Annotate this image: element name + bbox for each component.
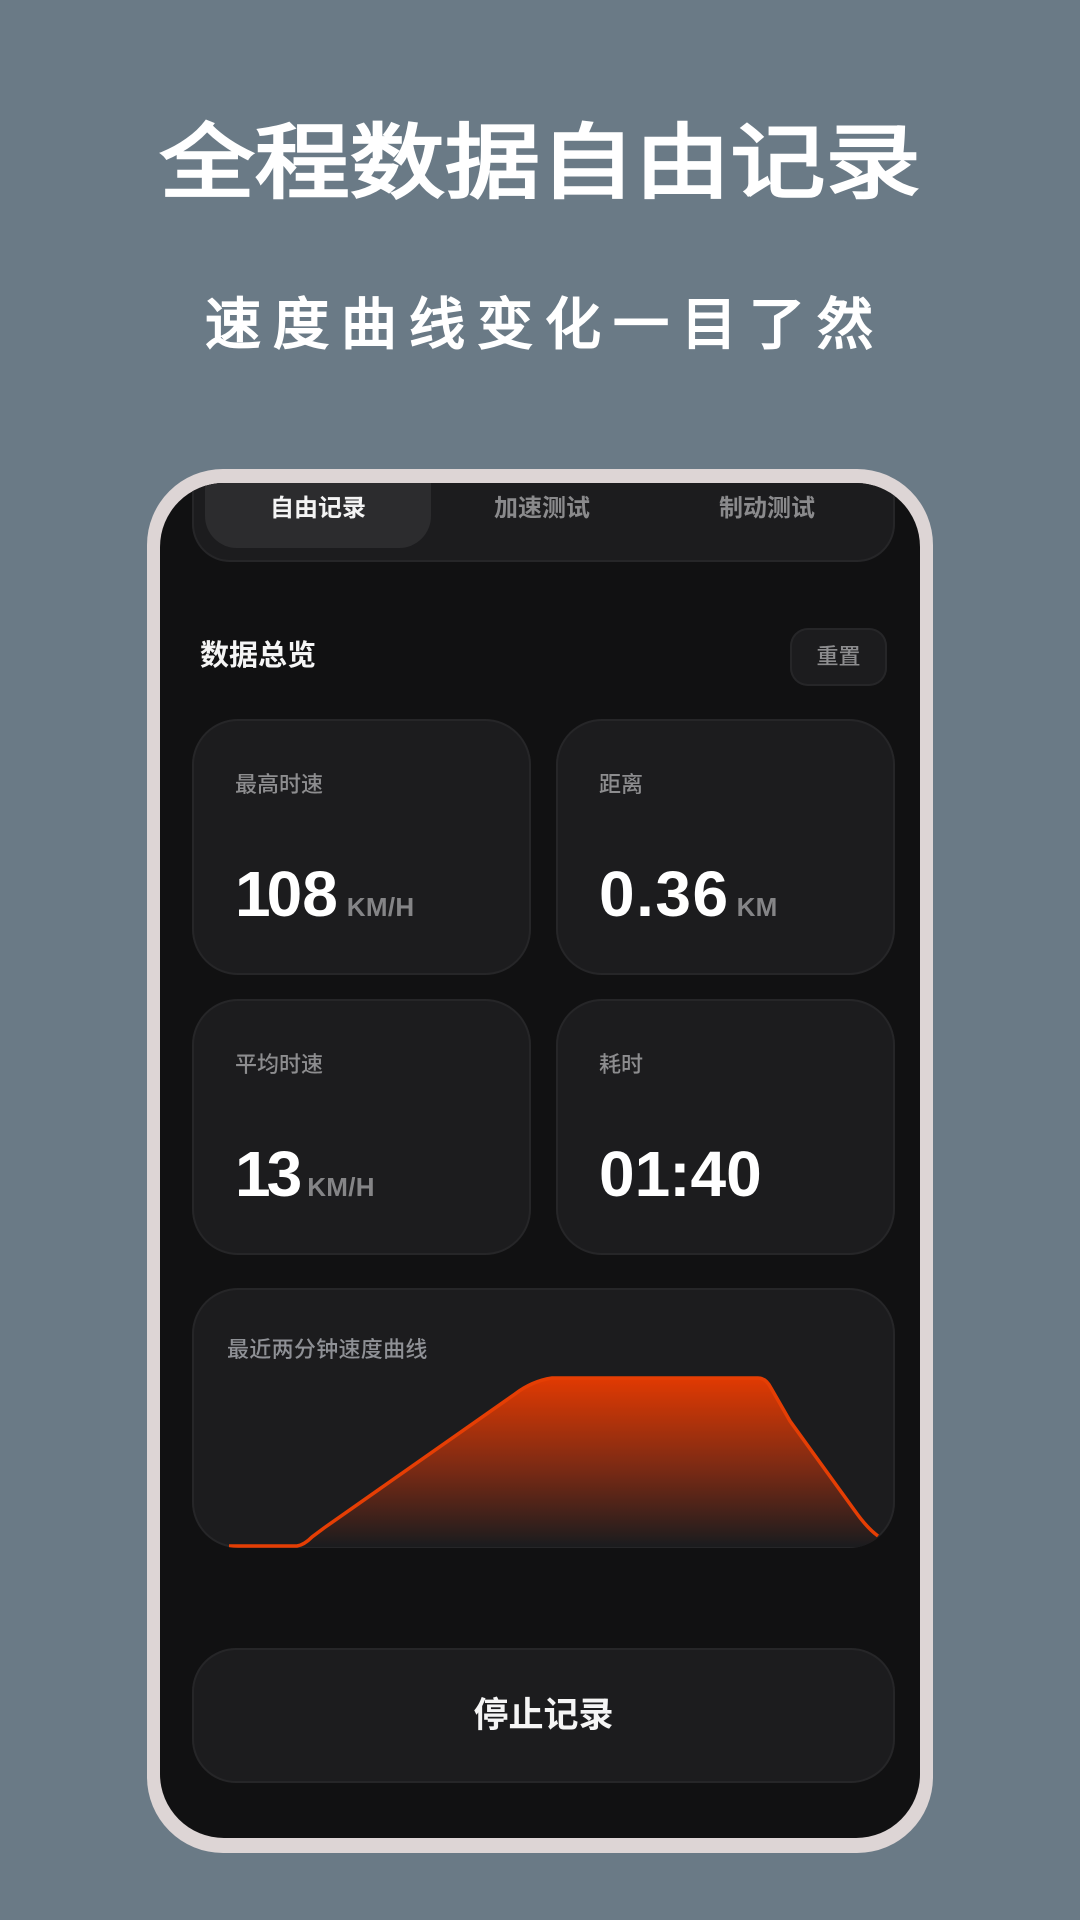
phone frame bbox=[147, 469, 933, 1853]
tab label: free record: 自由记录 bbox=[270, 495, 366, 522]
phone screen bbox=[160, 483, 920, 1838]
stat card: elapsed time bbox=[556, 999, 895, 1255]
reset button: 重置 bbox=[816, 644, 860, 669]
label: 耗时 bbox=[599, 1052, 643, 1077]
label: 距离 bbox=[599, 772, 643, 797]
stat card: distance bbox=[556, 719, 895, 975]
label: 平均时速 bbox=[235, 1052, 323, 1077]
active tab: free record bbox=[205, 443, 431, 548]
reset button bbox=[790, 628, 887, 686]
tab label: acceleration test: 加速测试 bbox=[494, 495, 590, 522]
title: 全程数据自由记录 bbox=[160, 118, 920, 209]
tab label: braking test: 制动测试 bbox=[719, 495, 815, 522]
stat card: average speed bbox=[192, 999, 531, 1255]
label: 最高时速 bbox=[235, 772, 323, 797]
value: 01:40 bbox=[599, 1138, 762, 1210]
subtitle: 速度曲线变化一目了然 bbox=[205, 293, 885, 356]
value: 0.36 KM bbox=[599, 858, 778, 930]
stat card: top speed bbox=[192, 719, 531, 975]
stop recording button bbox=[192, 1648, 895, 1783]
chart title: 最近两分钟速度曲线 bbox=[227, 1337, 428, 1362]
chart panel bbox=[192, 1288, 895, 1548]
section heading: 数据总览 bbox=[200, 640, 316, 672]
stop recording button: 停止记录 bbox=[473, 1696, 614, 1735]
speed area chart bbox=[229, 1376, 879, 1548]
tab bar bbox=[192, 433, 895, 562]
value: 13KM/H bbox=[235, 1138, 375, 1210]
value: 108 KM/H bbox=[235, 858, 414, 930]
